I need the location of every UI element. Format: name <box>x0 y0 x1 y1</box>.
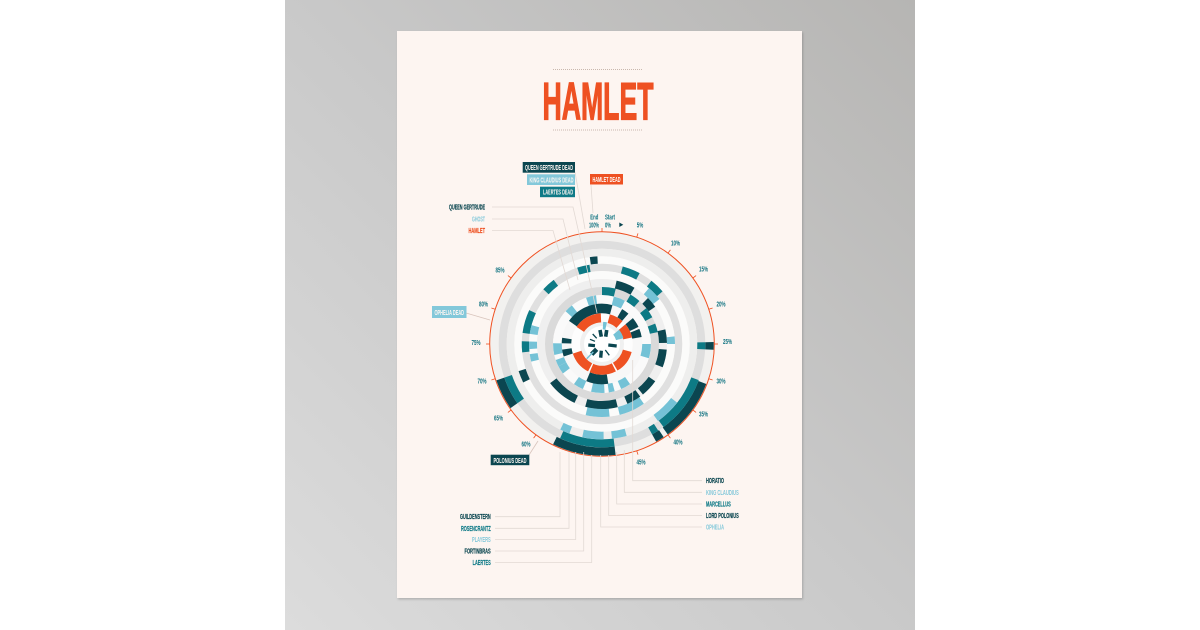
percent ticks <box>486 228 718 455</box>
track 12 segments <box>576 318 628 370</box>
character segments <box>452 194 752 494</box>
label: king claudius dead: KING CLAUDIUS DEAD <box>530 177 574 184</box>
character labels top left: HAMLET <box>468 228 485 235</box>
character labels bottom right: LORD POLONIUS <box>706 513 739 520</box>
character labels bottom right: OPHELIA <box>706 524 724 532</box>
background rings <box>494 236 710 452</box>
label: king claudius dead <box>527 174 575 185</box>
radial chart <box>452 194 752 494</box>
track 5 segments <box>494 236 710 452</box>
percent labels: 20% <box>716 302 726 308</box>
track 2 segments <box>464 206 740 482</box>
percent labels: 45% <box>636 460 646 466</box>
character labels bottom left: PLAYERS <box>472 537 491 544</box>
percent labels: 30% <box>716 378 726 386</box>
percent labels: 5% <box>637 222 644 230</box>
centre ticks <box>587 330 617 359</box>
track 8 segments <box>527 269 677 419</box>
character labels top left <box>449 204 485 235</box>
percent labels: 80% <box>479 302 488 308</box>
character labels bottom right: MARCELLUS <box>706 502 731 508</box>
track 4 segments <box>490 232 714 456</box>
label: queen gertrude dead: QUEEN GERTRUDE DEAD <box>525 165 573 172</box>
end and start markers: Start <box>605 214 615 222</box>
leader lines <box>466 172 702 562</box>
character labels bottom left: LAERTES <box>473 560 491 567</box>
track 9 segments <box>539 281 665 407</box>
label: hamlet dead: HAMLET DEAD <box>592 177 620 184</box>
track 7 segments <box>516 258 688 430</box>
track 10 segments <box>552 294 652 394</box>
end and start markers: 0% <box>605 222 611 230</box>
track 6 segments <box>505 247 699 441</box>
percent labels: 35% <box>699 412 708 418</box>
percent labels: 65% <box>494 416 503 422</box>
title block <box>542 70 654 132</box>
label: polonius dead: POLONIUS DEAD <box>494 458 526 465</box>
character labels top left: QUEEN GERTRUDE <box>449 204 485 212</box>
background wall <box>285 0 915 630</box>
label: ophelia dead: OPHELIA DEAD <box>434 310 464 317</box>
title block: HAMLET <box>542 72 654 132</box>
end and start markers <box>589 214 623 230</box>
percent labels: 40% <box>674 440 683 446</box>
character labels bottom left <box>460 514 491 567</box>
character labels bottom right: KING CLAUDIUS <box>706 490 739 497</box>
track 3 segments <box>474 216 730 472</box>
label: laertes dead: LAERTES DEAD <box>543 190 573 197</box>
percent labels: 85% <box>496 268 505 274</box>
end and start markers: 100% <box>589 222 599 230</box>
percent labels: 60% <box>522 442 531 448</box>
end and start markers: End <box>590 214 598 222</box>
character labels bottom right: HORATIO <box>706 478 724 485</box>
character labels bottom right <box>706 478 739 532</box>
label: hamlet dead <box>590 174 623 184</box>
character labels top left: GHOST <box>472 216 485 224</box>
percent labels: 75% <box>472 340 481 347</box>
label: ophelia dead <box>432 306 466 318</box>
outer orange ring <box>490 232 714 456</box>
character labels bottom left: FORTINBRAS <box>464 548 491 556</box>
label: polonius dead <box>491 455 529 465</box>
label: queen gertrude dead <box>523 162 575 173</box>
percent labels: 15% <box>699 266 708 274</box>
percent labels: 25% <box>723 339 732 346</box>
character labels bottom left: GUILDENSTERN <box>460 514 491 521</box>
poster sheet <box>397 31 802 598</box>
character labels bottom left: ROSENCRANTZ <box>461 526 491 533</box>
percent labels: 10% <box>671 240 680 248</box>
track 1 segments <box>452 194 752 494</box>
percent labels: 70% <box>478 378 487 386</box>
percent labels <box>472 222 732 466</box>
track 11 hamlet segments <box>565 307 639 381</box>
label: laertes dead <box>540 187 575 197</box>
